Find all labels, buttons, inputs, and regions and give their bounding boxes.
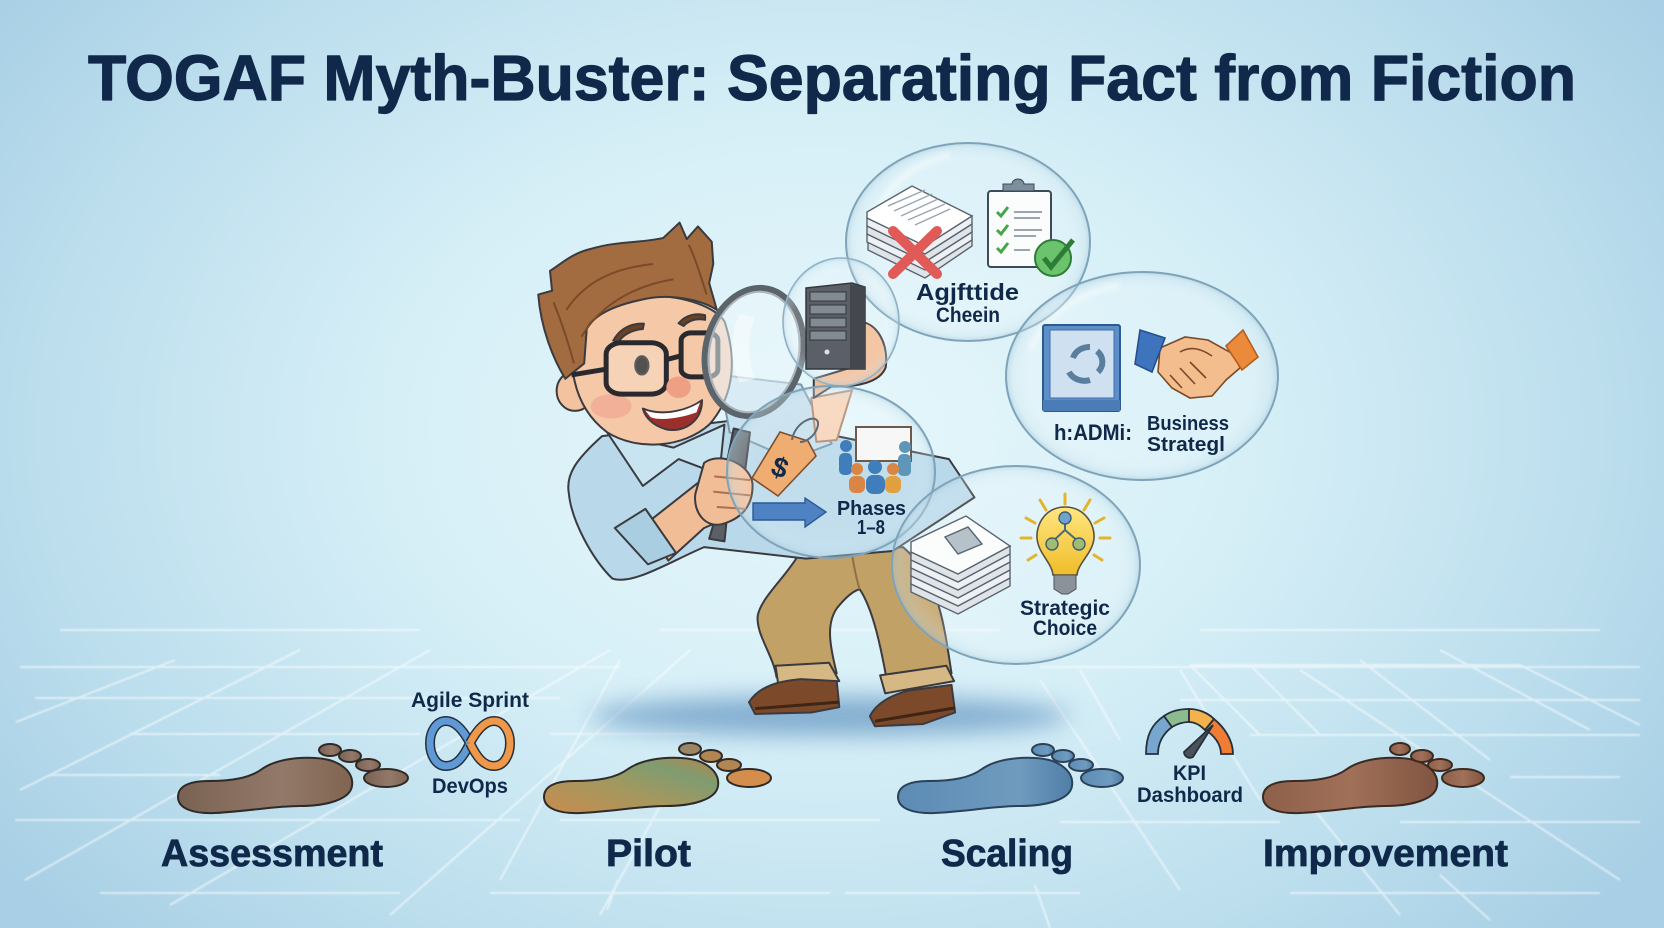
- label: KPI: [1173, 762, 1206, 785]
- footprint: [544, 743, 771, 813]
- floor grid: [15, 630, 1640, 928]
- ear: [557, 371, 593, 411]
- label: Strategic: [1020, 597, 1110, 620]
- hair strands: [554, 245, 707, 363]
- label: DevOps: [432, 775, 508, 798]
- bubble highlight: [1030, 285, 1120, 350]
- icon: green check badge: [1035, 240, 1073, 276]
- bubble: server: [783, 258, 899, 386]
- icon: price tag: $: [767, 450, 793, 485]
- label: Cheein: [936, 304, 1000, 327]
- boots: [749, 679, 955, 726]
- icon: gauge: [1146, 709, 1233, 758]
- bubble: documents and agile: [846, 143, 1090, 341]
- fingers: [713, 476, 751, 509]
- icon: presentation with audience: [839, 427, 911, 494]
- label: Scaling: [941, 833, 1073, 875]
- teeth: [645, 402, 700, 419]
- label: h:ADMi:: [1054, 420, 1132, 445]
- hair: [538, 223, 717, 379]
- label: Dashboard: [1137, 784, 1243, 807]
- cheek: [591, 394, 632, 419]
- label: Strategl: [1147, 434, 1225, 456]
- step: assessment: [161, 744, 408, 875]
- KPI dashboard: [1137, 709, 1243, 807]
- title: TOGAF Myth-Buster: Separating Fact from Fiction: [88, 42, 1576, 114]
- icon: ADM book: [1043, 325, 1120, 411]
- footprint: [1263, 743, 1484, 813]
- left forearm: [645, 482, 740, 561]
- icon: infinity loop: [430, 721, 510, 766]
- bubble outline: [1006, 272, 1278, 480]
- devops icon group: [411, 689, 529, 798]
- icon: paper stack: [911, 516, 1010, 614]
- icon: arrow: [753, 498, 826, 527]
- bubble: ADM and business strategy: [1006, 272, 1278, 480]
- label: Agile Sprint: [411, 689, 529, 712]
- eyebrows: [613, 324, 644, 342]
- label: Business: [1147, 413, 1229, 435]
- icon: server tower: [806, 283, 865, 369]
- label: Assessment: [161, 833, 383, 875]
- face: [572, 295, 732, 445]
- eye: [635, 356, 648, 375]
- bubble outline: [783, 258, 899, 386]
- label: Pilot: [606, 833, 691, 875]
- collar: [607, 425, 724, 486]
- bubble: cost and phases: [727, 386, 935, 558]
- raised sleeve: [719, 375, 832, 459]
- lens glare: [732, 314, 755, 383]
- shirt: [568, 421, 974, 580]
- hand on handle: [695, 458, 753, 525]
- icon: handshake: [1135, 330, 1258, 398]
- icon: red cross: [893, 231, 937, 274]
- step: scaling: [898, 744, 1123, 875]
- step: pilot: [544, 743, 771, 875]
- icon: light bulb: [1021, 494, 1110, 594]
- right forearm and hand: [811, 390, 852, 442]
- magnifier handle: [709, 429, 750, 541]
- magnifier ring: [696, 284, 812, 420]
- label: Agjfttide: [916, 279, 1019, 305]
- nose: [666, 376, 691, 398]
- label: 1–8: [857, 517, 885, 539]
- label: Improvement: [1263, 833, 1508, 875]
- bubble outline: [892, 466, 1140, 664]
- label: Phases: [837, 498, 906, 520]
- mouth: [643, 400, 702, 430]
- bubble outline: [846, 143, 1090, 341]
- cuff: [615, 509, 676, 564]
- footprint: [898, 744, 1123, 813]
- icon: price tag: [752, 419, 818, 496]
- neck: [628, 421, 709, 467]
- trousers: [758, 547, 954, 693]
- floor shadow under character: [590, 696, 1070, 736]
- character with magnifying glass: [538, 223, 974, 726]
- bubble: strategic choice: [892, 466, 1140, 664]
- bubble highlight: [875, 155, 950, 220]
- step: improvement: [1263, 743, 1508, 875]
- icon: clipboard: [988, 179, 1051, 267]
- label: Choice: [1033, 617, 1097, 640]
- icon: stack of papers: [867, 186, 972, 278]
- bubble outline: [727, 386, 935, 558]
- glasses: [571, 333, 718, 394]
- footprint: [178, 744, 408, 813]
